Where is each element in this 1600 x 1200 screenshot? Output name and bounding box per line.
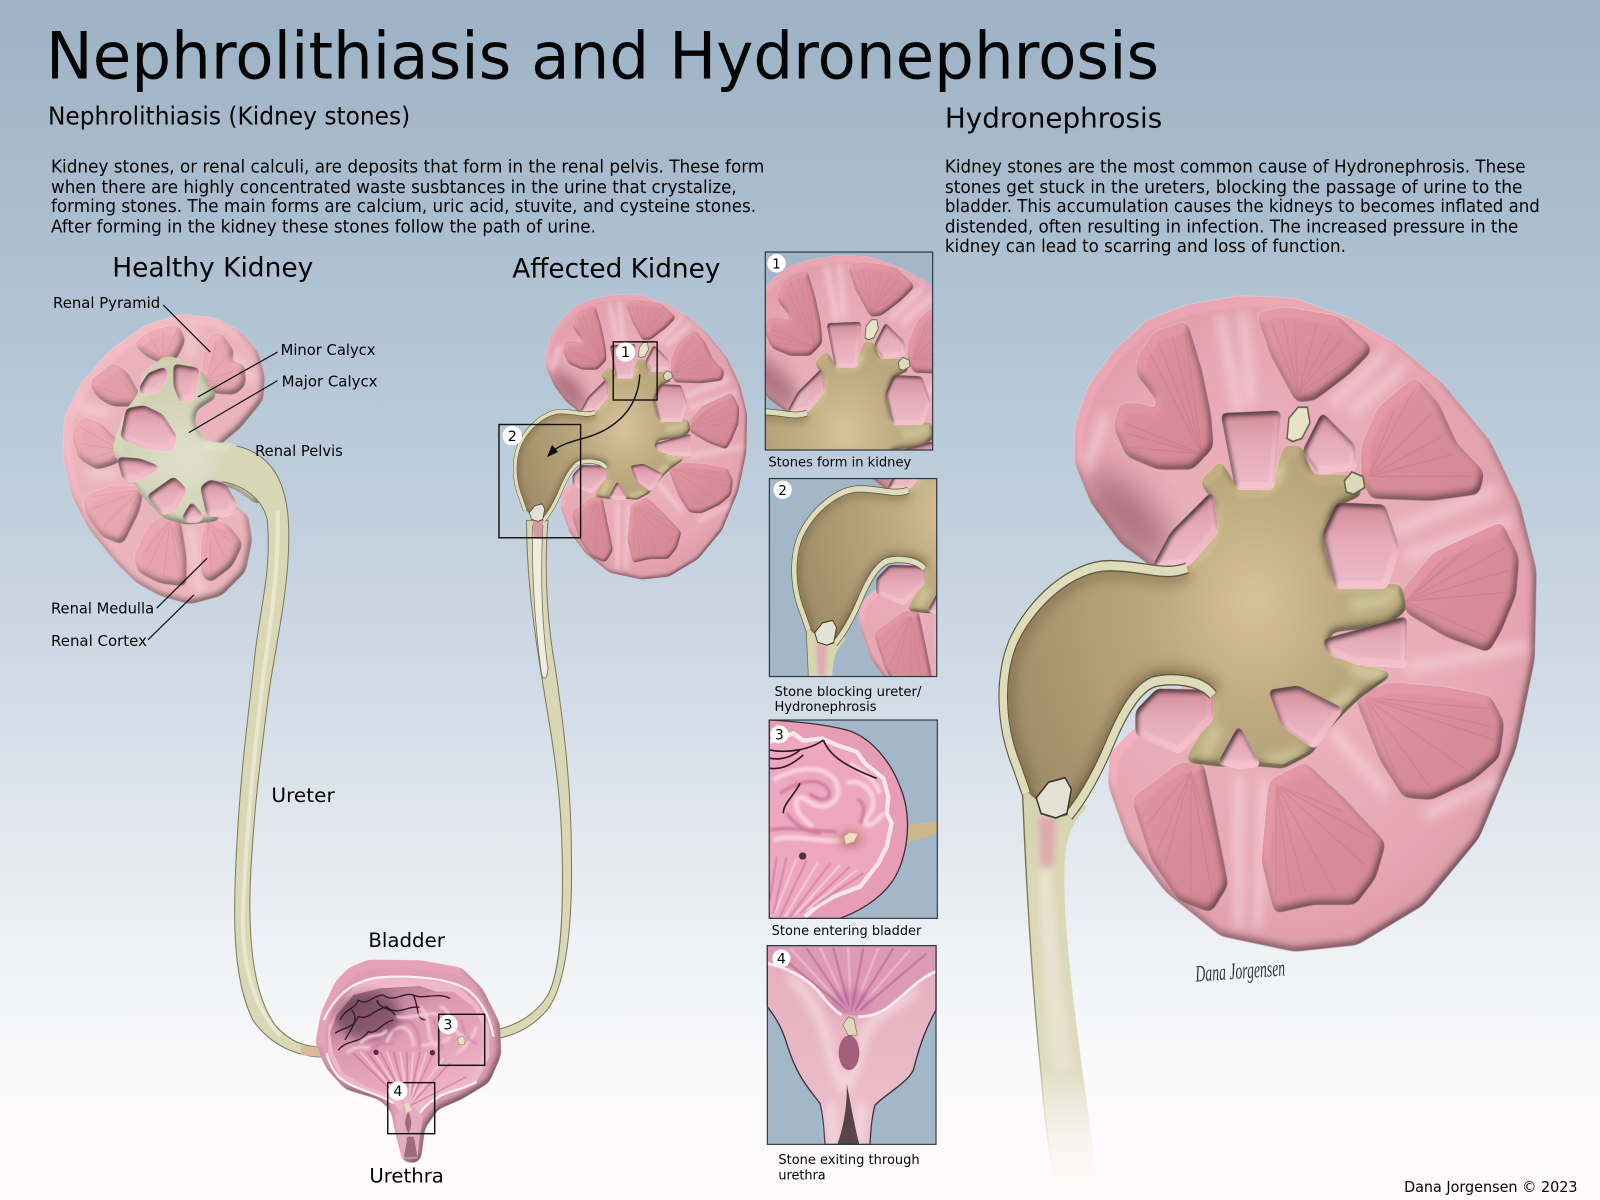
marker 1: 1 xyxy=(621,345,630,361)
text block: nephrolithiasis description: After forming in the kidney these stones follow the path of urine. xyxy=(51,218,596,238)
rim highlight xyxy=(770,733,892,917)
folds xyxy=(770,740,883,917)
bladder neck xyxy=(767,946,936,1144)
inset 1: stones form in kidney: Stones form in kidney xyxy=(768,455,911,470)
text block: hydronephrosis description: distended, often resulting in infection. The increased pressure in the xyxy=(945,218,1518,238)
marker 4 xyxy=(388,1081,435,1134)
inset 2: stone blocking ureter: Stone blocking ureter/ xyxy=(774,685,922,700)
folds xyxy=(335,994,477,1107)
inset markers on anatomy xyxy=(388,342,657,1134)
labels: healthy kidney: Major Calycx xyxy=(282,374,378,391)
text block: hydronephrosis description: Kidney stones are the most common cause of Hydronephrosis. These xyxy=(945,157,1526,177)
inset 2: stone blocking ureter: 2 xyxy=(778,484,787,499)
heading: nephrolithiasis: Nephrolithiasis (Kidney stones) xyxy=(48,101,410,130)
rim highlights xyxy=(324,977,493,1118)
urethra xyxy=(395,1107,423,1158)
text block: hydronephrosis description xyxy=(945,157,1540,257)
marker 3 xyxy=(438,1014,485,1065)
trigone xyxy=(767,946,936,1015)
text block: hydronephrosis description: bladder. This accumulation causes the kidneys to becomes inflated and xyxy=(945,197,1540,217)
bladder wall section xyxy=(769,720,908,918)
illustration: bladder xyxy=(315,959,501,1163)
interior xyxy=(769,735,892,918)
stone shadow xyxy=(838,831,862,848)
marker 1 xyxy=(613,342,657,400)
stone xyxy=(844,833,857,844)
renal cortex xyxy=(63,314,265,604)
arrow: stone path xyxy=(547,374,640,457)
inset 3: stone entering bladder xyxy=(769,720,937,939)
bladder stone xyxy=(457,1036,465,1045)
urethra xyxy=(837,1083,859,1144)
credit: Dana Jorgensen © 2023 xyxy=(1404,1178,1578,1196)
label: urethra: Urethra xyxy=(369,1165,444,1188)
inset 2: stone blocking ureter: Hydronephrosis xyxy=(774,700,877,715)
illustration: large hydronephrotic kidney xyxy=(1002,296,1537,952)
text block: nephrolithiasis description: forming stones. The main forms are calcium, uric acid, stuvite, and cysteine stones. xyxy=(51,197,756,217)
title: Nephrolithiasis and Hydronephrosis xyxy=(46,19,1159,95)
marker 4: 4 xyxy=(393,1084,402,1100)
ureteral openings xyxy=(373,1050,435,1055)
labels: healthy kidney: Renal Pelvis xyxy=(255,443,343,460)
lumen xyxy=(839,1035,859,1070)
label: ureter: Ureter xyxy=(271,784,335,807)
signature: Dana Jorgensen xyxy=(1194,955,1286,988)
urethra stone xyxy=(404,1103,412,1113)
rim band xyxy=(328,977,489,1117)
panel: hydronephrosis text xyxy=(945,103,1540,257)
bladder interior xyxy=(330,986,483,1110)
inset 1: stones form in kidney: 1 xyxy=(772,257,781,272)
inset 2: stone blocking ureter xyxy=(768,478,938,714)
labels: healthy kidney: Renal Cortex xyxy=(51,633,147,650)
text block: nephrolithiasis description xyxy=(51,157,764,238)
labels: healthy kidney: Renal Medulla xyxy=(51,600,154,617)
text block: hydronephrosis description: kidney can lead to scarring and loss of function. xyxy=(945,237,1346,257)
wall highlights xyxy=(790,977,917,1144)
illustration: large hydronephrotic ureter xyxy=(1022,786,1097,1189)
stone xyxy=(843,1017,857,1035)
labels: healthy kidney: Minor Calycx xyxy=(281,342,376,359)
ureteral opening xyxy=(799,852,806,860)
illustration: affected kidney xyxy=(515,294,747,580)
inset 1: stones form in kidney xyxy=(764,251,934,470)
bladder wall xyxy=(315,959,501,1163)
renal pyramids xyxy=(71,324,246,587)
inset 4: stone exiting through urethra: urethra xyxy=(778,1168,826,1183)
inset 4: stone exiting through urethra: Stone exiting through xyxy=(778,1153,920,1168)
text block: nephrolithiasis description: when there are highly concentrated waste susbtances in the urine that crystalize, xyxy=(51,178,737,198)
illustration: affected ureter xyxy=(497,520,572,1039)
marker 3: 3 xyxy=(443,1018,452,1034)
text block: nephrolithiasis description: Kidney stones, or renal calculi, are deposits that form in the renal pelvis. These form xyxy=(51,157,764,177)
illustration: healthy kidney xyxy=(63,314,267,604)
renal sinus and calyces xyxy=(113,357,267,525)
inset 3: stone entering bladder: 3 xyxy=(775,727,784,743)
illustration: healthy ureter xyxy=(214,445,322,1057)
text block: hydronephrosis description: stones get stuck in the ureters, blocking the passage of urine to the xyxy=(945,178,1522,198)
inset 3: stone entering bladder: Stone entering bladder xyxy=(772,924,922,939)
heading: hydronephrosis: Hydronephrosis xyxy=(945,103,1162,135)
interior shading xyxy=(335,993,402,1040)
leader lines: healthy kidney xyxy=(148,305,278,640)
cortex highlights xyxy=(77,323,253,593)
heading: healthy kidney: Healthy Kidney xyxy=(112,253,313,284)
ureter stub xyxy=(907,821,937,843)
minor calyx cups xyxy=(117,363,237,523)
panel: nephrolithiasis text xyxy=(48,101,764,238)
inset 4: stone exiting through urethra: 4 xyxy=(777,951,786,967)
heading: affected kidney: Affected Kidney xyxy=(512,254,720,285)
urethra lumen xyxy=(404,1112,417,1157)
marker 2 xyxy=(499,424,581,538)
labels: healthy kidney xyxy=(51,295,378,650)
label: bladder: Bladder xyxy=(368,929,445,952)
inset 4: stone exiting through urethra xyxy=(767,946,936,1183)
marker 2: 2 xyxy=(508,429,517,445)
labels: healthy kidney: Renal Pyramid xyxy=(53,295,160,312)
